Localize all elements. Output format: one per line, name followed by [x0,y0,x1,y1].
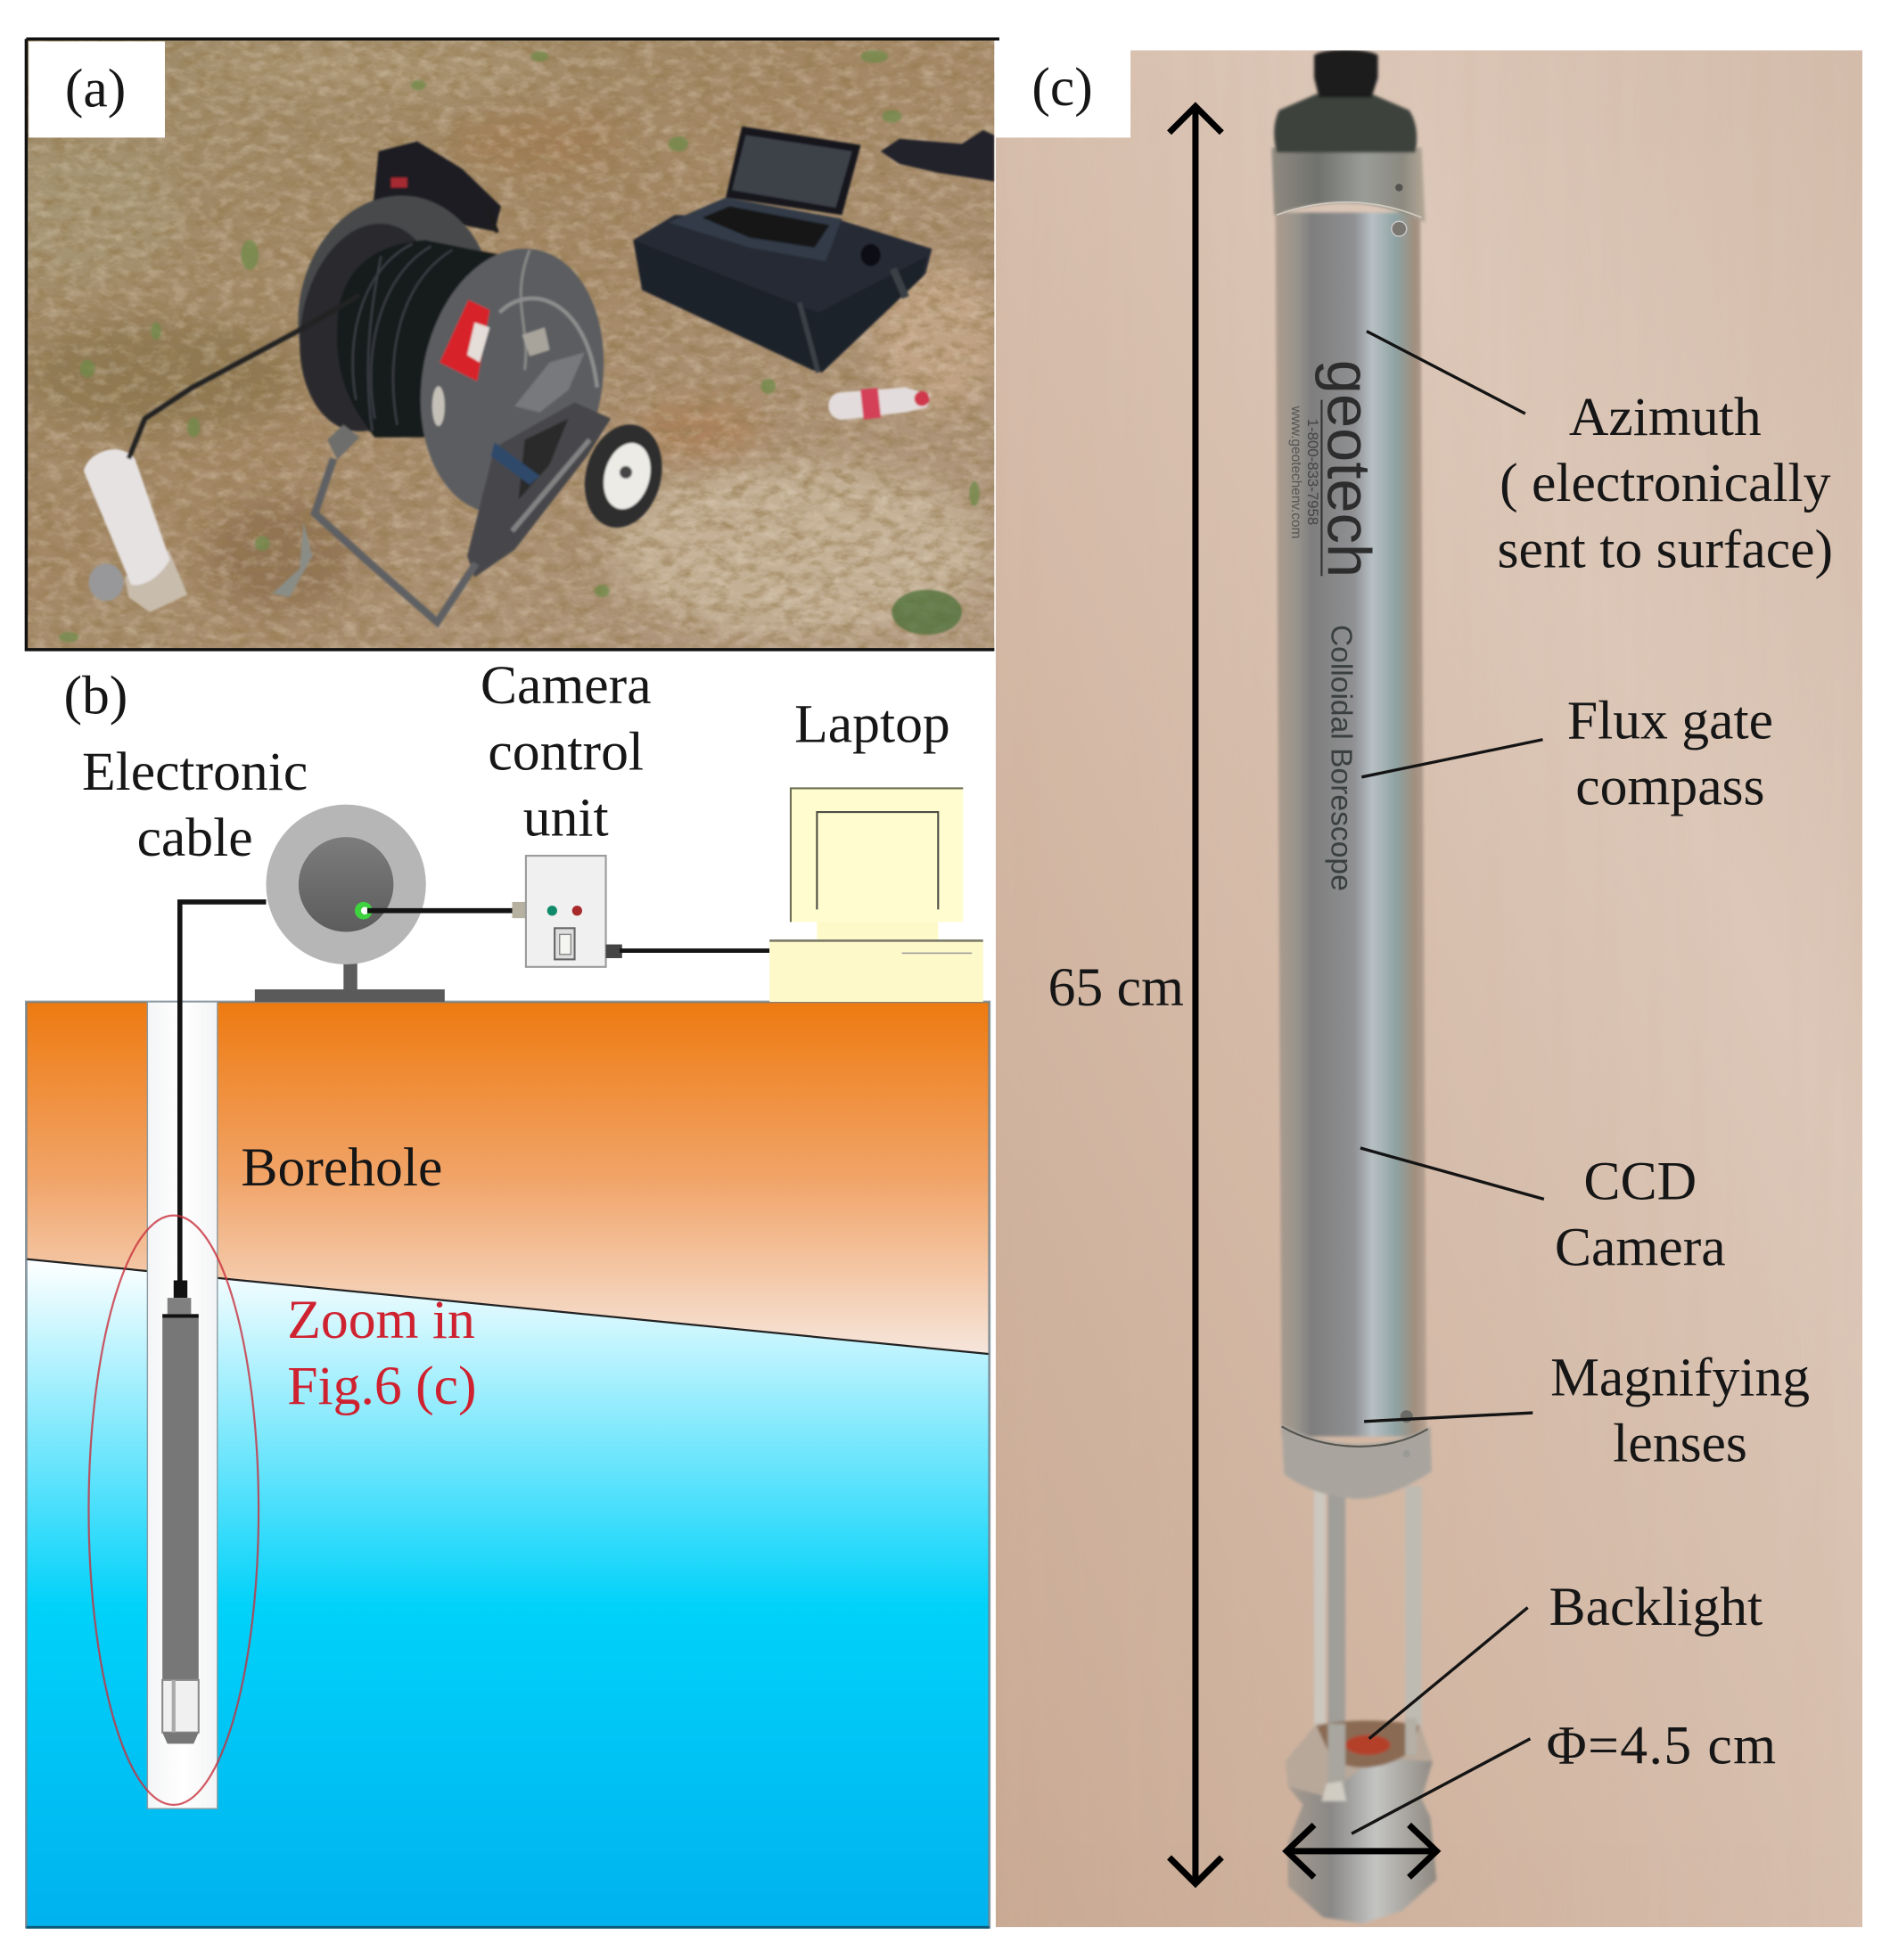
icon: backpack [881,130,994,181]
cable to control unit [367,909,514,913]
cable to laptop [606,945,769,958]
water layer [26,1259,990,1927]
label: electronic cable: cable [137,808,253,868]
tube lettering: 1-800-833-7958 [1304,419,1321,525]
hub and frame [514,352,585,413]
label: camera control unit: control [488,721,644,782]
borehole [147,1002,218,1808]
dark collar [1274,94,1417,152]
label: zoom in reference: Fig.6 (c) [287,1356,477,1416]
label: camera control unit: Camera [481,655,652,716]
leader lines [1352,332,1544,1833]
label: borehole: Borehole [241,1137,442,1198]
label: diameter: Φ=4.5 cm [1547,1716,1777,1776]
label: azimuth: sent to surface) [1498,519,1833,579]
connector [512,902,526,918]
lower band [1282,1424,1432,1499]
tube lettering: geotech [1314,360,1383,578]
label: CCD camera: CCD [1583,1151,1697,1211]
label: azimuth: ( electronically [1500,453,1831,513]
label: backlight: Backlight [1549,1577,1763,1637]
icon: PVC well pipe [84,295,360,612]
label: (c): (c) [1031,57,1093,118]
tube lettering: Colloidal Borescope [1325,625,1358,891]
label: camera control unit: unit [523,788,609,849]
wheel [583,422,663,529]
computer illustration [769,788,983,1002]
label: CCD camera: Camera [1555,1218,1726,1278]
arrow: 65 cm length [1170,106,1221,1883]
electronic cable [180,902,266,1286]
probe in borehole [162,1280,199,1743]
panel c: borescope photograph [996,50,1862,1927]
icon: equipment bag [373,142,501,233]
label: electronic cable: Electronic [82,742,308,802]
label: flux gate compass: Flux gate [1567,690,1773,750]
icon: laptop on black case [633,127,932,373]
zoom ellipse [88,1216,259,1805]
label box: panel a: (a) [65,58,126,119]
tube lettering [1288,360,1383,891]
label: flux gate compass: compass [1575,757,1765,817]
label: laptop: Laptop [794,694,950,755]
frame lines: panel a [26,39,999,650]
backlight [1317,1720,1419,1767]
sticker [440,300,489,381]
icon: cable reel on cart [272,183,673,622]
cage bars [1314,1487,1326,1774]
panel b: borehole schematic [26,788,990,1927]
tube with soft edge [1271,50,1436,1923]
camera control unit box [526,856,606,967]
label: magnifying lenses: Magnifying [1550,1347,1810,1407]
label: zoom in reference: Zoom in [287,1290,475,1350]
tube lettering: www.geotechenv.com [1288,406,1303,538]
panel a: field photograph [0,39,999,652]
bottom head [1286,1724,1436,1923]
arrow: 4.5 cm diameter [1286,1825,1436,1877]
label box: panel a [29,42,165,137]
top connector cap [1314,50,1378,98]
upper sleeve [1271,148,1426,223]
borescope body [1271,50,1436,1923]
label: (b): (b) [63,665,127,726]
label: 65 cm: 65 cm [1048,957,1184,1018]
earth layer [26,1002,990,1354]
label: azimuth: Azimuth [1569,387,1762,447]
vegetation specks [59,50,980,642]
shoulder highlights [1286,1724,1433,1796]
label: magnifying lenses: lenses [1613,1414,1747,1474]
icon: plastic bottle [828,388,931,420]
cable reel [255,805,445,1002]
